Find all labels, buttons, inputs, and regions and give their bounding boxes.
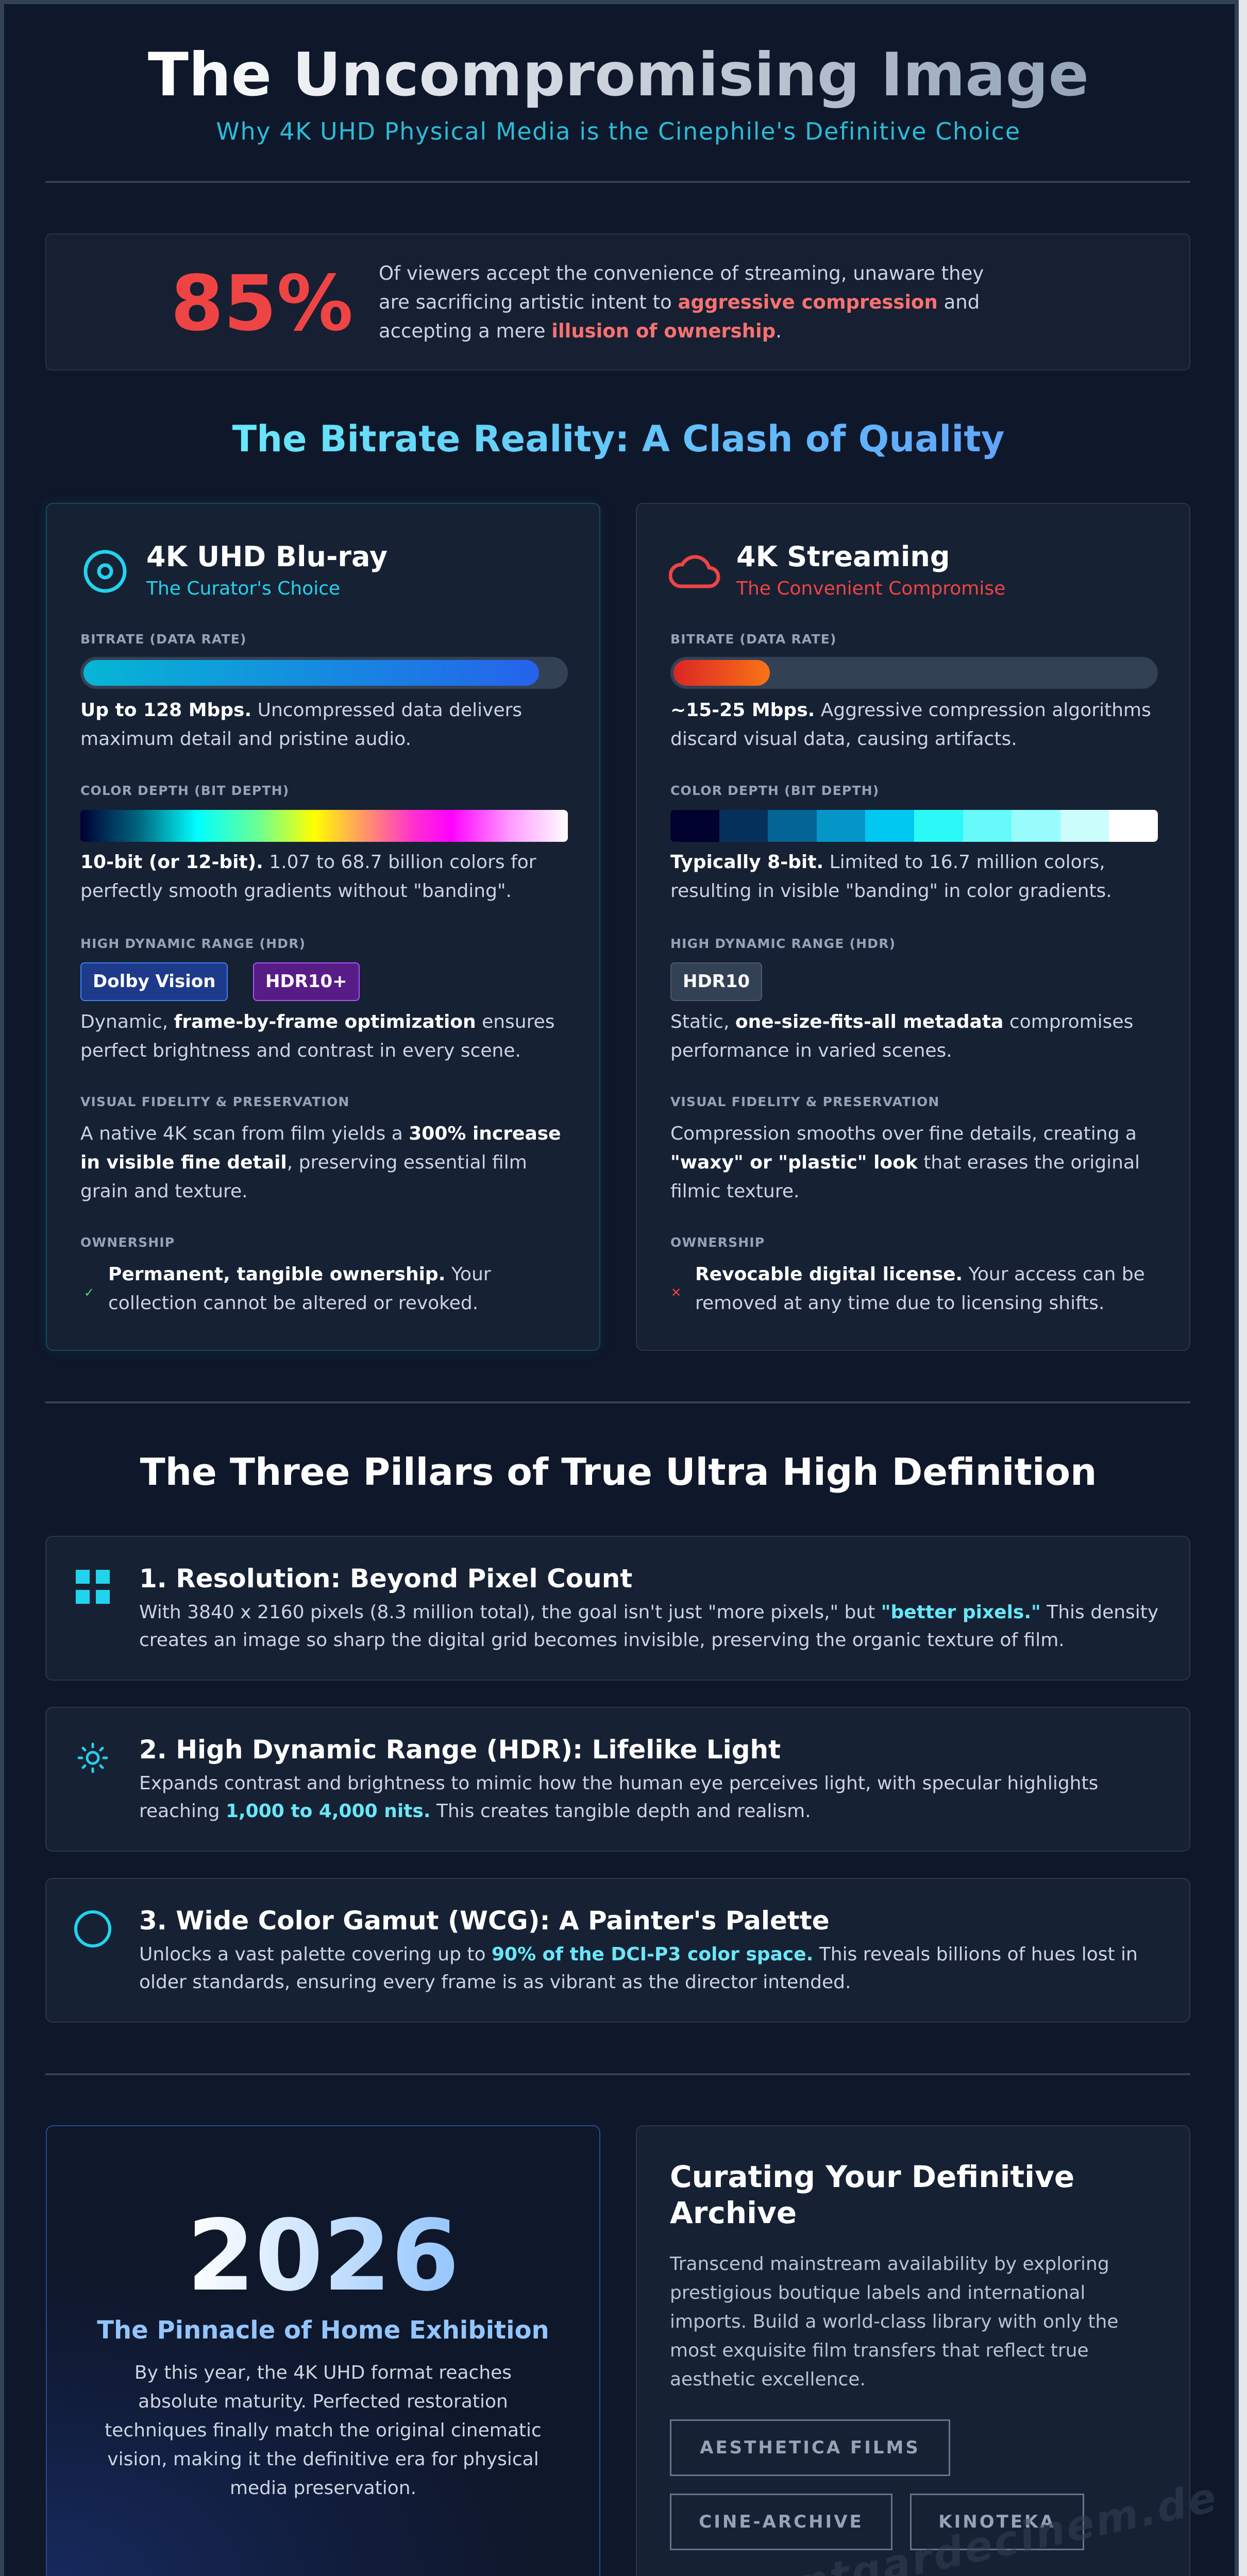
body: vision, making it the definitive era for physical: [107, 2449, 539, 2470]
tag: Kinoteka: KINOTEKA: [938, 2512, 1056, 2532]
body: [105, 2362, 542, 2499]
label: visual fidelity: VISUAL FIDELITY & PRESERVATION: [80, 1094, 350, 1109]
heading: Archive: [670, 2195, 797, 2230]
body: prestigious boutique labels and international: [670, 2282, 1085, 2303]
icon: cross: ✕: [671, 1285, 681, 1300]
text: visual fidelity: [80, 1123, 561, 1202]
text: ownership: Revocable digital license. Your access can be: [695, 1264, 1145, 1285]
label: ownership: OWNERSHIP: [670, 1235, 765, 1250]
body: reaching 1,000 to 4,000 nits. This creates tangible depth and realism.: [139, 1801, 811, 1822]
label: color depth: COLOR DEPTH (BIT DEPTH): [670, 783, 879, 798]
body: Unlocks a vast palette covering up to 90% of the DCI-P3 color space. This reveals billions of hues lost in: [139, 1944, 1138, 1965]
text: color depth: Typically 8-bit. Limited to 16.7 million colors,: [670, 852, 1105, 873]
label: color depth: COLOR DEPTH (BIT DEPTH): [80, 783, 289, 798]
text: color depth: 10-bit (or 12-bit). 1.07 to 68.7 billion colors for: [80, 852, 536, 873]
badge: HDR10: HDR10: [683, 971, 750, 992]
stat number: 85%: [171, 259, 353, 348]
label: visual fidelity: VISUAL FIDELITY & PRESERVATION: [670, 1094, 940, 1109]
text: visual fidelity: [670, 1123, 1140, 1202]
title: 1. Resolution: Beyond Pixel Count: [139, 1564, 632, 1594]
body: creates an image so sharp the digital grid becomes invisible, preserving the organic texture of film.: [139, 1630, 1065, 1651]
text: hdr: Static, one-size-fits-all metadata compromises: [670, 1011, 1133, 1032]
label: bitrate: BITRATE (DATA RATE): [80, 632, 247, 647]
body: aesthetic excellence.: [670, 2369, 866, 2390]
heading: 4K Streaming: [736, 540, 950, 573]
stat text: are sacrificing artistic intent to aggressive compression and: [379, 291, 980, 313]
icon: circle: [74, 1910, 111, 1947]
panel: curating archive: [636, 2125, 1190, 2576]
text: bitrate: [80, 700, 522, 750]
text: visual fidelity: filmic texture.: [670, 1181, 799, 1202]
text: ownership: [108, 1264, 491, 1314]
body: [139, 1773, 1098, 1822]
text: visual fidelity: A native 4K scan from film yields a 300% increase: [80, 1123, 561, 1144]
tag: Aesthetica Films: [670, 2419, 950, 2476]
text: bitrate: Up to 128 Mbps. Uncompressed data delivers: [80, 700, 522, 721]
stat callout box: [45, 233, 1190, 370]
badge: Dolby Vision: [80, 962, 228, 1001]
label: hdr: HIGH DYNAMIC RANGE (HDR): [80, 936, 306, 951]
text: color depth: resulting in visible "banding" in color gradients.: [670, 880, 1112, 902]
body: media preservation.: [230, 2478, 416, 2499]
text: visual fidelity: in visible fine detail, preserving essential film: [80, 1152, 527, 1173]
stat text: accepting a mere illusion of ownership.: [379, 320, 782, 342]
icon: grid: [76, 1570, 110, 1604]
bar: bitrate: [80, 657, 568, 689]
panel: pillar resolution: [45, 1536, 1190, 1681]
body: With 3840 x 2160 pixels (8.3 million total), the goal isn't just "more pixels," but "better pixels." This density: [139, 1602, 1158, 1623]
text: bitrate: [670, 700, 1151, 750]
body: Transcend mainstream availability by exploring: [670, 2253, 1109, 2275]
label: hdr: HIGH DYNAMIC RANGE (HDR): [670, 936, 896, 951]
text: color depth: [670, 852, 1112, 902]
panel: 2026: [46, 2125, 600, 2576]
subheading: The Pinnacle of Home Exhibition: [97, 2316, 549, 2345]
text: hdr: [80, 1011, 555, 1061]
panel: pillar HDR: [45, 1707, 1190, 1852]
label: ownership: OWNERSHIP: [80, 1235, 175, 1250]
title: 2. High Dynamic Range (HDR): Lifelike Light: [139, 1735, 781, 1765]
body: Expands contrast and brightness to mimic how the human eye perceives light, with specular highlights: [139, 1773, 1098, 1794]
badge: HDR10+: [253, 962, 360, 1001]
tag: Kinoteka: [910, 2494, 1084, 2550]
body: most exquisite film transfers that reflect true: [670, 2340, 1089, 2361]
text: color depth: [80, 852, 536, 902]
icon: sun: [77, 1742, 108, 1773]
stat text: [379, 262, 984, 342]
body: [670, 2253, 1119, 2390]
heading: [670, 2159, 1074, 2230]
section heading: three pillars: The Three Pillars of True Ultra High Definition: [140, 1450, 1097, 1494]
icon: check: ✓: [84, 1285, 94, 1300]
tag: Aesthetica Films: AESTHETICA FILMS: [700, 2437, 920, 2458]
badge: HDR10+: HDR10+: [265, 971, 347, 992]
stepped bar: color depth: [670, 810, 1158, 842]
tag: Cine-Archive: CINE-ARCHIVE: [699, 2512, 864, 2532]
icon: disc: [83, 550, 127, 592]
heading: Curating Your Definitive: [670, 2159, 1074, 2194]
bar: bitrate: [670, 657, 1158, 689]
body: absolute maturity. Perfected restoration: [138, 2391, 508, 2412]
label: bitrate: BITRATE (DATA RATE): [670, 632, 837, 647]
text: ownership: [695, 1264, 1145, 1314]
text: bitrate: discard visual data, causing artifacts.: [670, 728, 1017, 750]
title: 3. Wide Color Gamut (WCG): A Painter's Palette: [139, 1906, 830, 1936]
text: visual fidelity: grain and texture.: [80, 1181, 248, 1202]
badge: Dolby Vision: Dolby Vision: [93, 971, 215, 992]
title: The Uncompromising Image: [148, 40, 1089, 110]
text: hdr: [670, 1011, 1133, 1061]
body: [139, 1944, 1138, 1993]
body: techniques finally match the original cinematic: [105, 2420, 542, 2441]
gradient bar: color depth: [80, 810, 568, 842]
text: ownership: Permanent, tangible ownership. Your: [108, 1264, 491, 1285]
icon: cloud: [669, 555, 720, 588]
body: older standards, ensuring every frame is as vibrant as the director intended.: [139, 1972, 851, 1993]
year: 2026: [187, 2199, 459, 2313]
section heading: bitrate: The Bitrate Reality: A Clash of Quality: [232, 418, 1004, 460]
heading: 4K UHD Blu-ray: [146, 540, 387, 573]
body: imports. Build a world-class library with only the: [670, 2311, 1119, 2332]
text: ownership: removed at any time due to licensing shifts.: [695, 1293, 1104, 1314]
text: bitrate: maximum detail and pristine audio.: [80, 728, 411, 750]
subtitle: Why 4K UHD Physical Media is the Cinephile's Definitive Choice: [216, 117, 1021, 145]
text: visual fidelity: "waxy" or "plastic" look that erases the original: [670, 1152, 1140, 1173]
text: hdr: Dynamic, frame-by-frame optimization ensures: [80, 1011, 555, 1032]
text: hdr: performance in varied scenes.: [670, 1040, 952, 1061]
text: hdr: perfect brightness and contrast in every scene.: [80, 1040, 521, 1061]
subheading: The Convenient Compromise: [736, 578, 1005, 599]
badge: HDR10: [670, 962, 762, 1001]
panel: 4K UHD Blu-ray: [46, 503, 600, 1351]
body: By this year, the 4K UHD format reaches: [134, 2362, 512, 2383]
text: bitrate: ~15-25 Mbps. Aggressive compression algorithms: [670, 700, 1151, 721]
body: [139, 1602, 1158, 1651]
tag: Cine-Archive: [670, 2494, 892, 2550]
text: ownership: collection cannot be altered or revoked.: [108, 1293, 478, 1314]
subheading: The Curator's Choice: [146, 578, 340, 599]
panel: pillar WCG: [45, 1878, 1190, 2023]
text: color depth: perfectly smooth gradients without "banding".: [80, 880, 512, 902]
panel: 4K Streaming: [636, 503, 1190, 1351]
text: visual fidelity: Compression smooths over fine details, creating a: [670, 1123, 1137, 1144]
stat text: Of viewers accept the convenience of streaming, unaware they: [379, 262, 984, 284]
